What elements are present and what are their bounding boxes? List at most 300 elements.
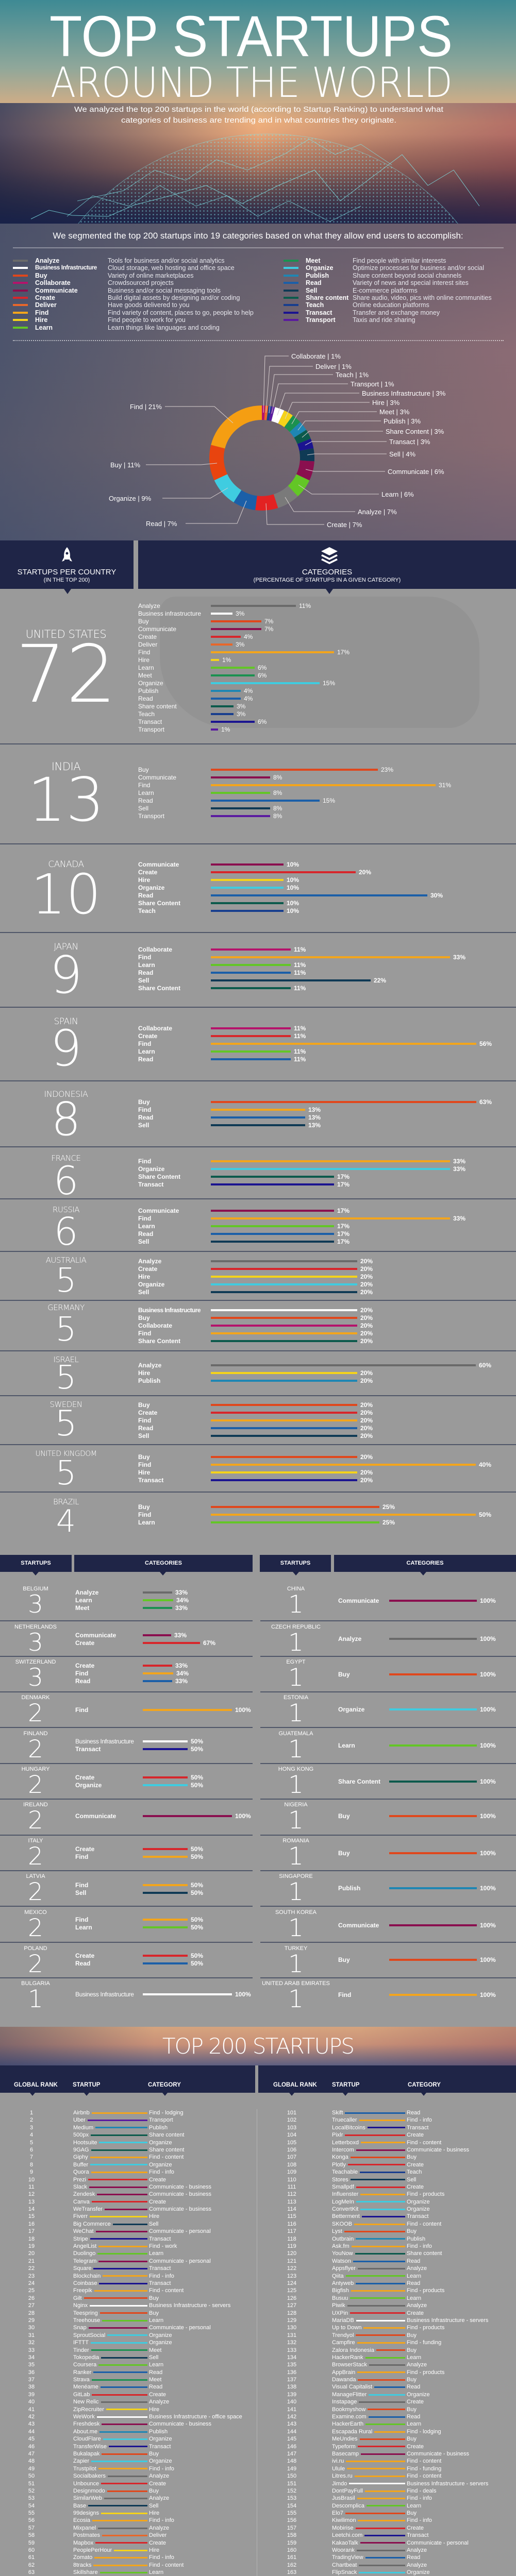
list: ranks 101-200: KakaoTalk [332,2540,358,2546]
country: Israel: Publish [138,1377,160,1384]
intro text [74,105,444,125]
list: ranks 101-200: 149 [287,2466,296,2472]
donut chart: Read | 7% [146,520,177,528]
country: United States: Learn [138,664,154,671]
country: United States: Teach [138,710,155,718]
country: Russia: 17% [337,1223,349,1230]
panel: small countries right: ROMANIA [282,1838,309,1844]
list: ranks 101-200: 137 [287,2377,296,2383]
list: ranks 101-200: 119 [287,2243,296,2249]
donut chart [109,352,446,529]
list: ranks 1-100: Meet [149,2347,161,2353]
panel: small countries left: Transact [75,1745,101,1753]
list: ranks 1-100: Sell [149,2503,158,2509]
list: ranks 101-200: Visual Capitalist [332,2384,372,2390]
panel: small countries right: 1 [288,1771,304,1799]
list: ranks 1-100 [28,2110,242,2575]
list: ranks 1-100: 50 [28,2473,35,2479]
header: top 200 table [0,2065,516,2096]
list: ranks 101-200: Analyze [407,2302,427,2309]
panel: small countries left: 50% [191,1853,203,1860]
country: Japan: 11% [294,961,306,969]
header: categories: (PERCENTAGE OF STARTUPS IN A GIVEN CATEGORY) [254,577,401,583]
country: United States: 72 [15,629,116,721]
country: United States: 11% [299,602,311,609]
list: ranks 101-200: Find - lodging [407,2429,441,2435]
panel: small countries right: NIGERIA [284,1802,308,1808]
header: small countries: STARTUPS [21,1560,51,1566]
donut chart: Business Infrastructure | 3% [362,389,446,397]
panel: small countries right: Buy [338,1850,350,1857]
country: Sweden: 20% [360,1417,373,1424]
list: ranks 101-200: 107 [287,2154,296,2160]
list: ranks 101-200: Transact [407,2213,428,2219]
country: United States: Deliver [138,641,157,648]
list: ranks 101-200: Buy [407,2347,417,2353]
country: India: Sell [138,805,148,812]
list: ranks 101-200: Basecamp [332,2451,359,2457]
list: ranks 101-200: Campfire [332,2340,355,2346]
country: France: FRANCE [52,1154,80,1163]
list: ranks 101-200: 110 [287,2177,296,2183]
list: ranks 101-200: Transact [407,2125,428,2131]
donut chart: Meet | 3% [379,408,410,416]
panel: small countries left: Find [75,1670,88,1677]
panel: small countries left: Find [75,1853,88,1860]
panel: small countries left: Meet [75,1604,89,1612]
list: ranks 1-100: Tinder [73,2347,89,2353]
donut chart: Communicate | 6% [388,468,444,476]
donut chart: Hire | 3% [372,399,400,406]
list: ranks 101-200: Qiita [332,2273,344,2279]
country: Spain: Create [138,1032,157,1040]
country: United States: 1% [222,656,231,664]
list: ranks 101-200: 130 [287,2325,296,2331]
list: ranks 1-100: Hootsuite [73,2140,97,2146]
list: ranks 1-100: Hire [149,2510,159,2516]
legend: Variety of news and special interest sites [353,279,469,286]
panel: small countries right: 100% [480,1635,496,1642]
list: ranks 101-200: Find - content [407,2140,441,2146]
panel: small countries right: 1 [288,1950,304,1978]
list: ranks 1-100: Prezi [73,2177,86,2183]
panel: small countries right: Find [338,1991,351,1998]
list: ranks 1-100: 6 [30,2147,33,2153]
list: ranks 101-200: Business Infrastructure - servers [407,2481,488,2487]
legend: Transfer and exchange money [353,309,440,316]
panel: small countries left: POLAND [24,1945,47,1952]
legend: Collaborate [35,279,71,286]
country: Russia: 17% [337,1207,349,1214]
list: ranks 1-100: Fiverr [73,2213,88,2219]
country: United States: Transact [138,718,162,725]
intro text: We analyzed the top 200 startups in the world (according to Startup Ranking) to understand what [74,105,444,114]
panel: small countries right: SINGAPORE [279,1873,313,1879]
country: India: 8% [273,805,282,812]
country: Israel: 5 [56,1359,76,1396]
panel: small countries left: DENMARK [21,1694,49,1701]
panel: small countries left: 2 [28,1842,43,1871]
country: France [0,1154,516,1204]
list: ranks 101-200: Learn [407,2421,421,2427]
list: ranks 1-100: Big Commerce [73,2221,111,2227]
list: ranks 101-200: 133 [287,2347,296,2353]
country: Indonesia: 13% [308,1106,321,1113]
donut chart: Create | 7% [327,521,362,529]
country: Germany: Business Infrastructure [138,1307,201,1314]
country: Russia: Find [138,1215,151,1222]
country: Sweden: 20% [360,1401,373,1409]
list: ranks 101-200: Skift [332,2110,343,2116]
country: Sweden: Sell [138,1432,149,1439]
country: Canada: Teach [138,907,156,914]
panel: small countries left: 2 [28,1950,43,1978]
country: Indonesia: 8 [52,1092,80,1146]
list: ranks 101-200: 121 [287,2258,296,2264]
country: Russia: Learn [138,1223,155,1230]
country: France: Organize [138,1165,164,1173]
country: India: Transport [138,812,164,820]
list: ranks 1-100: Communicate - personal [149,2228,211,2234]
list: ranks 101-200: 111 [288,2184,296,2190]
heading: segmentation: We segmented the top 200 startups into 19 categories based on what they allow end users to accomplish: [53,231,463,241]
country: United States: 6% [258,672,267,679]
legend: Find people with similar interests [353,257,446,264]
list: ranks 101-200: Create [407,2184,424,2190]
list: ranks 101-200: MeUndies [332,2436,358,2442]
country: Canada: 30% [430,892,443,899]
country: Germany: Find [138,1330,151,1337]
intro text: categories of business are trending and in what countries they originate. [121,116,396,125]
list: ranks 1-100: Find - info [149,2466,174,2472]
list: ranks 101-200: Find - content [407,2221,441,2227]
list: ranks 101-200: Communicate - business [407,2147,469,2153]
list: ranks 101-200: 141 [287,2406,296,2413]
country: Russia: 17% [337,1238,349,1245]
country: United States: UNITED STATES [26,628,106,640]
panel: small countries right: 100% [480,1812,496,1820]
list: ranks 101-200: HackerRank [332,2354,363,2361]
list: ranks 1-100: Read [149,2369,162,2376]
legend: Online education platforms [353,301,429,309]
list: ranks 1-100: 61 [28,2554,35,2561]
country: Canada: CANADA [48,859,84,870]
list: ranks 101-200: Organize [407,2199,430,2205]
list: ranks 1-100: Create [149,2392,166,2398]
panel: small countries left: 50% [191,1745,203,1753]
list: ranks 1-100: Nginx [73,2302,88,2309]
list: ranks 1-100: Square [73,2265,91,2272]
list: ranks 1-100: 38 [28,2384,35,2390]
list: ranks 1-100: Trustpilot [73,2466,96,2472]
legend: Taxis and ride sharing [353,316,415,324]
list: ranks 1-100: Skillshare [73,2569,98,2575]
panel: small countries left: Create [75,1662,94,1669]
list: ranks 101-200: Transact [407,2532,428,2538]
donut chart: Transact | 3% [389,438,430,446]
country: Russia [0,1205,516,1254]
country: Indonesia [0,1089,516,1147]
panel: small countries left: 33% [175,1589,188,1596]
header: startups per country: (IN THE TOP 200) [44,577,90,583]
list: ranks 1-100: Mapbox [73,2540,93,2546]
list: ranks 101-200: 144 [287,2429,296,2435]
panel: small countries right: Communicate [338,1922,379,1929]
list: ranks 101-200: Create [407,2162,424,2168]
list: ranks 1-100: PeoplePerHour [73,2547,112,2553]
country: Brazil: 50% [479,1511,491,1518]
list: ranks 101-200: SKOOB [332,2221,352,2227]
header: small countries: CATEGORIES [407,1560,443,1566]
list: ranks 101-200: 160 [287,2547,296,2553]
country: Canada: 10% [287,884,299,891]
panel: small countries left: Organize [75,1782,102,1789]
legend: Learn things like languages and coding [108,324,220,331]
list: ranks 1-100: Find - work [149,2243,177,2249]
list: ranks 1-100: 51 [28,2481,35,2487]
list: ranks 101-200: 136 [287,2369,296,2376]
list: ranks 1-100: 56 [28,2517,35,2523]
panel: small countries left: NETHERLANDS [14,1624,57,1630]
list: ranks 1-100: Organize [149,2458,172,2464]
list: ranks 1-100: 41 [28,2406,35,2413]
list: ranks 1-100: Transact [149,2236,171,2242]
country: Australia: Hire [138,1273,150,1280]
list: ranks 101-200: Analyze [407,2547,427,2553]
country: Brazil: Learn [138,1519,155,1526]
list: ranks 101-200: Learn [407,2273,421,2279]
panel: small countries left: BELGIUM [23,1586,48,1592]
list: ranks 1-100: Duolingo [73,2250,95,2257]
list: ranks 1-100: Communicate - business [149,2421,211,2427]
country: Japan: Find [138,954,151,961]
list: ranks 1-100: Analyze [149,2473,169,2479]
list: ranks 1-100: 9GAG [73,2147,89,2153]
list: ranks 1-100: Giphy [73,2154,88,2160]
country: Israel: 20% [360,1369,373,1377]
donut chart: Buy | 11% [110,461,140,469]
list: ranks 1-100: Treehouse [73,2317,100,2324]
legend: Find people to work for you [108,316,186,324]
list: ranks 1-100: 13 [28,2199,35,2205]
list: ranks 101-200: Find - info [407,2495,432,2501]
list: ranks 1-100: 20 [28,2250,35,2257]
panel: small countries left: Find [75,1706,88,1714]
list: ranks 101-200: Find - funding [407,2340,441,2346]
list: ranks 101-200: LogMeIn [332,2199,354,2205]
list: ranks 1-100: Organize [149,2162,172,2168]
list: ranks 101-200: 140 [287,2399,296,2405]
list: ranks 101-200: Jimdo [332,2481,347,2487]
panel: small countries left: Read [75,1677,90,1685]
country: Canada: 10 [31,863,101,927]
country: United States: 6% [258,664,267,671]
header: top 200 table: CATEGORY [148,2082,181,2088]
donut chart: Learn | 6% [381,490,414,498]
country: India: 8% [273,774,282,781]
list: ranks 1-100: 3 [30,2125,33,2131]
panel: small countries left: 50% [191,1882,203,1889]
country: Brazil: Buy [138,1503,150,1511]
list: ranks 1-100: Organize [149,2340,172,2346]
country: Canada: Communicate [138,861,179,868]
legend: E-commerce platforms [353,287,418,294]
country: Sweden: 20% [360,1425,373,1432]
list: ranks 101-200: Watson [332,2258,351,2264]
list: ranks 101-200: Litres.ru [332,2473,353,2479]
list: ranks 101-200: 135 [287,2362,296,2368]
country: Spain [0,1016,516,1081]
list: ranks 101-200: Organize [407,2392,430,2398]
list: ranks 101-200: Analyze [407,2362,427,2368]
country: Indonesia: Read [138,1114,153,1121]
panel: small countries left: 3 [28,1629,43,1657]
list: ranks 101-200: 134 [287,2354,296,2361]
list: ranks 101-200: 104 [287,2132,296,2138]
country: France: 33% [453,1158,465,1165]
list: ranks 101-200: Busuu [332,2295,348,2301]
panel: small countries left: LATVIA [26,1873,45,1879]
list: ranks 101-200: Leetchi.com [332,2532,362,2538]
list: ranks 101-200: Escapada Rural [332,2429,372,2435]
panel: small countries left: 50% [191,1924,203,1931]
legend: Buy [35,272,47,279]
panel: small countries left: 2 [28,1735,43,1764]
list: ranks 101-200: Piwik [332,2302,345,2309]
list: ranks 101-200: Read [407,2554,420,2561]
list: ranks 1-100: 15 [28,2213,35,2219]
list: ranks 1-100: 43 [28,2421,35,2427]
list: ranks 101-200: Elo7 [332,2510,343,2516]
panel: small countries left: Create [75,1845,94,1853]
panel: small countries left: 2 [28,1806,43,1835]
panel: small countries left: Learn [75,1597,92,1604]
list: ranks 1-100: Canva [73,2199,90,2205]
list: ranks 1-100: Buy [149,2451,159,2457]
list: ranks 1-100: 26 [28,2295,35,2301]
list: ranks 101-200: Outbrain [332,2236,354,2242]
panel: small countries left: 33% [175,1677,188,1685]
panel: small countries left: 1 [28,1985,43,2013]
legend: Variety of online marketplaces [108,272,194,279]
country: Spain: Collaborate [138,1025,172,1032]
panel: small countries right: 100% [480,1922,496,1929]
banner: top 200 startups [0,2027,516,2065]
list: ranks 1-100: Find - lodging [149,2110,184,2116]
list: ranks 1-100: Analyze [149,2525,169,2531]
list: ranks 1-100: Base [73,2503,86,2509]
list: ranks 1-100: 1 [30,2110,33,2116]
country: Spain: 11% [294,1048,306,1055]
list: ranks 101-200: Plotly [332,2162,346,2168]
panel: small countries right: Communicate [338,1597,379,1604]
list: ranks 1-100: 5 [30,2140,33,2146]
legend: Business and/or social messaging tools [108,287,221,294]
legend: Learn [35,324,53,331]
country: United States: 3% [236,641,244,648]
list: ranks 1-100: Zapier [73,2458,89,2464]
list: ranks 1-100: Telegram [73,2258,96,2264]
list: ranks 101-200: Teach [407,2169,422,2175]
list: ranks 101-200: Create [407,2525,424,2531]
donut chart: Collaborate | 1% [291,352,341,360]
country: Russia: 6 [54,1210,78,1254]
list: ranks 1-100: Buy [149,2310,159,2316]
list: ranks 101-200: 138 [287,2384,296,2390]
list: ranks 101-200: Ulule [332,2466,345,2472]
country: Israel: Analyze [138,1362,161,1369]
country: Japan: 22% [374,977,386,984]
list: ranks 101-200: Read [407,2258,420,2264]
list: ranks 1-100: Communicate - business [149,2206,211,2212]
subtitle: AROUND THE WORLD [51,59,453,107]
list: ranks 1-100: Create [149,2540,166,2546]
country: Germany: GERMANY [47,1303,85,1312]
list: ranks 101-200: 151 [287,2481,296,2487]
list: ranks 1-100: 12 [28,2191,35,2197]
list: ranks 101-200: BrowserStack [332,2362,367,2368]
list: ranks 1-100: 9 [30,2169,33,2175]
list: ranks 101-200: Trendyol [332,2332,354,2338]
panel: small countries left: HUNGARY [22,1766,49,1772]
list: ranks 1-100: 48 [28,2458,35,2464]
list: ranks 101-200: Letterboxd [332,2140,359,2146]
list: ranks 101-200: 128 [287,2310,296,2316]
list: ranks 101-200: Buy [407,2377,417,2383]
country: United States: 7% [264,618,273,625]
country: Indonesia: Find [138,1106,151,1113]
legend: Sell [306,287,317,294]
country: Spain: 56% [479,1040,492,1047]
country: India: 8% [273,812,282,820]
list: ranks 101-200: Mobirise [332,2525,354,2531]
country: Australia: 20% [360,1281,373,1288]
country: Russia: Read [138,1230,153,1238]
list: ranks 1-100: 99designs [73,2510,99,2516]
list: ranks 101-200: 123 [287,2273,296,2279]
list: ranks 101-200: Betterment [332,2213,360,2219]
list: ranks 101-200 [287,2110,488,2575]
list: ranks 101-200: 118 [287,2236,296,2242]
panel: small countries left: 50% [191,1916,203,1923]
header: top 200 table: CATEGORY [408,2082,441,2088]
donut chart: Deliver | 1% [315,363,352,370]
country: India: 13 [28,765,104,835]
list: ranks 1-100: 59 [28,2540,35,2546]
list: ranks 101-200: ivi.ru [332,2458,344,2464]
panel: small countries left: Business Infrastructure [75,1991,134,1998]
list: ranks 101-200: Learn [407,2295,421,2301]
panel: small countries left: 33% [174,1632,187,1639]
list: ranks 1-100: SimilarWeb [73,2495,102,2501]
panel: small countries left: BULGARIA [21,1980,50,1987]
country: Japan: Read [138,969,153,976]
list: ranks 1-100: Business Infrastructure - office space [149,2414,242,2420]
country: Japan: JAPAN [54,942,78,952]
list: ranks 101-200: Lyst [332,2228,342,2234]
country: Brazil [53,1497,491,1539]
list: ranks 1-100: Find - info [149,2169,174,2175]
list: ranks 1-100: Hire [149,2547,159,2553]
list: ranks 1-100: 60 [28,2547,35,2553]
country: United States: 6% [258,718,267,725]
country: Japan: 33% [453,954,465,961]
list: ranks 101-200: ConvertKit [332,2206,358,2212]
list: ranks 1-100: Find - info [149,2554,174,2561]
list: ranks 101-200: Typeform [332,2444,356,2450]
country: Canada: Create [138,869,157,876]
country: Australia: Sell [138,1289,149,1296]
